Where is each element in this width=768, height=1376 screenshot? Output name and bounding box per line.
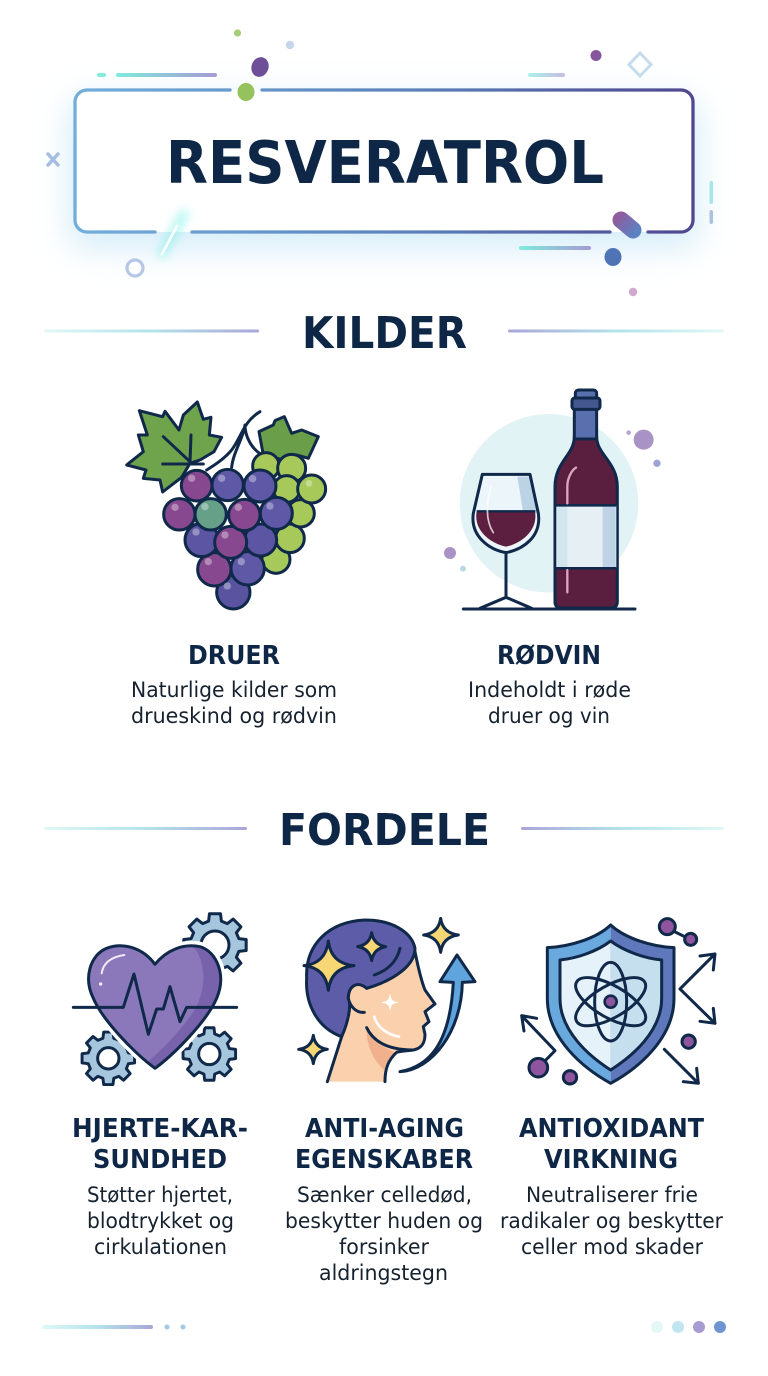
title: RESVERATROL bbox=[166, 128, 604, 197]
wine glass bbox=[473, 474, 539, 608]
leaf veins bbox=[163, 435, 203, 464]
benefit text: Hjerte-kar-sundhed: blodtrykket og bbox=[87, 1209, 234, 1233]
heart bbox=[89, 946, 221, 1068]
section heading: FORDELE bbox=[44, 805, 724, 856]
hair bbox=[307, 920, 415, 1037]
benefit text: Antioxidant: celler mod skader bbox=[521, 1235, 703, 1259]
benefit text: Antioxidant: Neutraliserer frie bbox=[526, 1183, 698, 1207]
benefit text: Antioxidant: VIRKNING bbox=[544, 1145, 678, 1175]
free radicals and deflection arrows bbox=[522, 919, 715, 1084]
benefit text: Anti-aging bbox=[285, 1114, 483, 1285]
description: DRUER: Naturlige kilder som bbox=[131, 678, 337, 702]
benefit text: Anti-aging: forsinker bbox=[339, 1235, 429, 1259]
header banner bbox=[48, 29, 713, 296]
icon: head with sparkles and arrow bbox=[299, 918, 475, 1082]
footer decoration bbox=[42, 1321, 726, 1333]
description: RØDVIN bbox=[468, 678, 631, 728]
gears bbox=[82, 914, 246, 1085]
benefit text: Hjerte-kar-sundhed: HJERTE-KAR- bbox=[72, 1114, 248, 1144]
stems bbox=[207, 412, 261, 470]
ear and jaw lines bbox=[348, 985, 367, 1012]
sparkles bbox=[299, 918, 458, 1064]
neck shadow bbox=[367, 1030, 395, 1070]
shield inner bbox=[560, 941, 611, 1070]
benefit text: Antioxidant bbox=[500, 1114, 723, 1259]
benefit text: Hjerte-kar-sundhed: SUNDHED bbox=[93, 1145, 227, 1175]
benefit text: Hjerte-kar-sundhed bbox=[72, 1114, 248, 1259]
atom bbox=[569, 962, 653, 1041]
label: DRUER: DRUER bbox=[188, 641, 280, 671]
description: RØDVIN: druer og vin bbox=[488, 704, 610, 728]
label: RØDVIN bbox=[468, 641, 631, 728]
section heading: KILDER: KILDER bbox=[302, 308, 467, 359]
face profile bbox=[327, 952, 435, 1082]
floating dots bbox=[444, 430, 661, 572]
benefit text: Hjerte-kar-sundhed: cirkulationen bbox=[94, 1235, 227, 1259]
neck and face bbox=[327, 951, 435, 1082]
label: RØDVIN: RØDVIN bbox=[497, 641, 601, 671]
upward arrow bbox=[400, 955, 475, 1072]
benefit text: Anti-aging: ANTI-AGING bbox=[305, 1114, 464, 1144]
base line bbox=[463, 604, 635, 613]
label: DRUER bbox=[131, 641, 337, 728]
section heading: KILDER bbox=[44, 308, 724, 359]
icon: grapes bbox=[127, 402, 326, 609]
title frame bbox=[75, 90, 693, 232]
purple grapes bbox=[164, 469, 292, 609]
icon: heart with gears bbox=[73, 914, 246, 1085]
cheek highlight bbox=[374, 1017, 399, 1037]
shield outer bbox=[547, 925, 611, 1083]
wine bottle bbox=[555, 390, 617, 608]
heart highlight bbox=[102, 955, 124, 973]
decorative particles bbox=[48, 29, 713, 296]
leaf left bbox=[127, 402, 222, 492]
icon: shield with atom bbox=[522, 919, 715, 1084]
green grapes bbox=[253, 453, 326, 573]
benefit text: Anti-aging: EGENSKABER bbox=[295, 1145, 473, 1175]
description: DRUER bbox=[131, 678, 337, 728]
leaf right bbox=[259, 417, 318, 460]
icon: wine bottle and glass bbox=[444, 390, 661, 609]
description: DRUER: drueskind og rødvin bbox=[131, 704, 337, 728]
benefit text: Antioxidant: ANTIOXIDANT bbox=[519, 1114, 704, 1144]
benefit text: Anti-aging: beskytter huden og bbox=[285, 1209, 483, 1233]
description: RØDVIN: Indeholdt i røde bbox=[468, 678, 631, 702]
heartbeat line bbox=[73, 974, 237, 1034]
section heading: FORDELE: FORDELE bbox=[279, 805, 490, 856]
backdrop circle bbox=[460, 414, 638, 593]
banner glow bbox=[68, 98, 700, 250]
benefit text: Hjerte-kar-sundhed: Støtter hjertet, bbox=[87, 1183, 233, 1207]
benefit text: Antioxidant: radikaler og beskytter bbox=[500, 1209, 723, 1233]
benefit text: Anti-aging: aldringstegn bbox=[319, 1261, 448, 1285]
grape highlights bbox=[171, 475, 312, 590]
benefit text: Anti-aging: Sænker celledød, bbox=[297, 1183, 472, 1207]
